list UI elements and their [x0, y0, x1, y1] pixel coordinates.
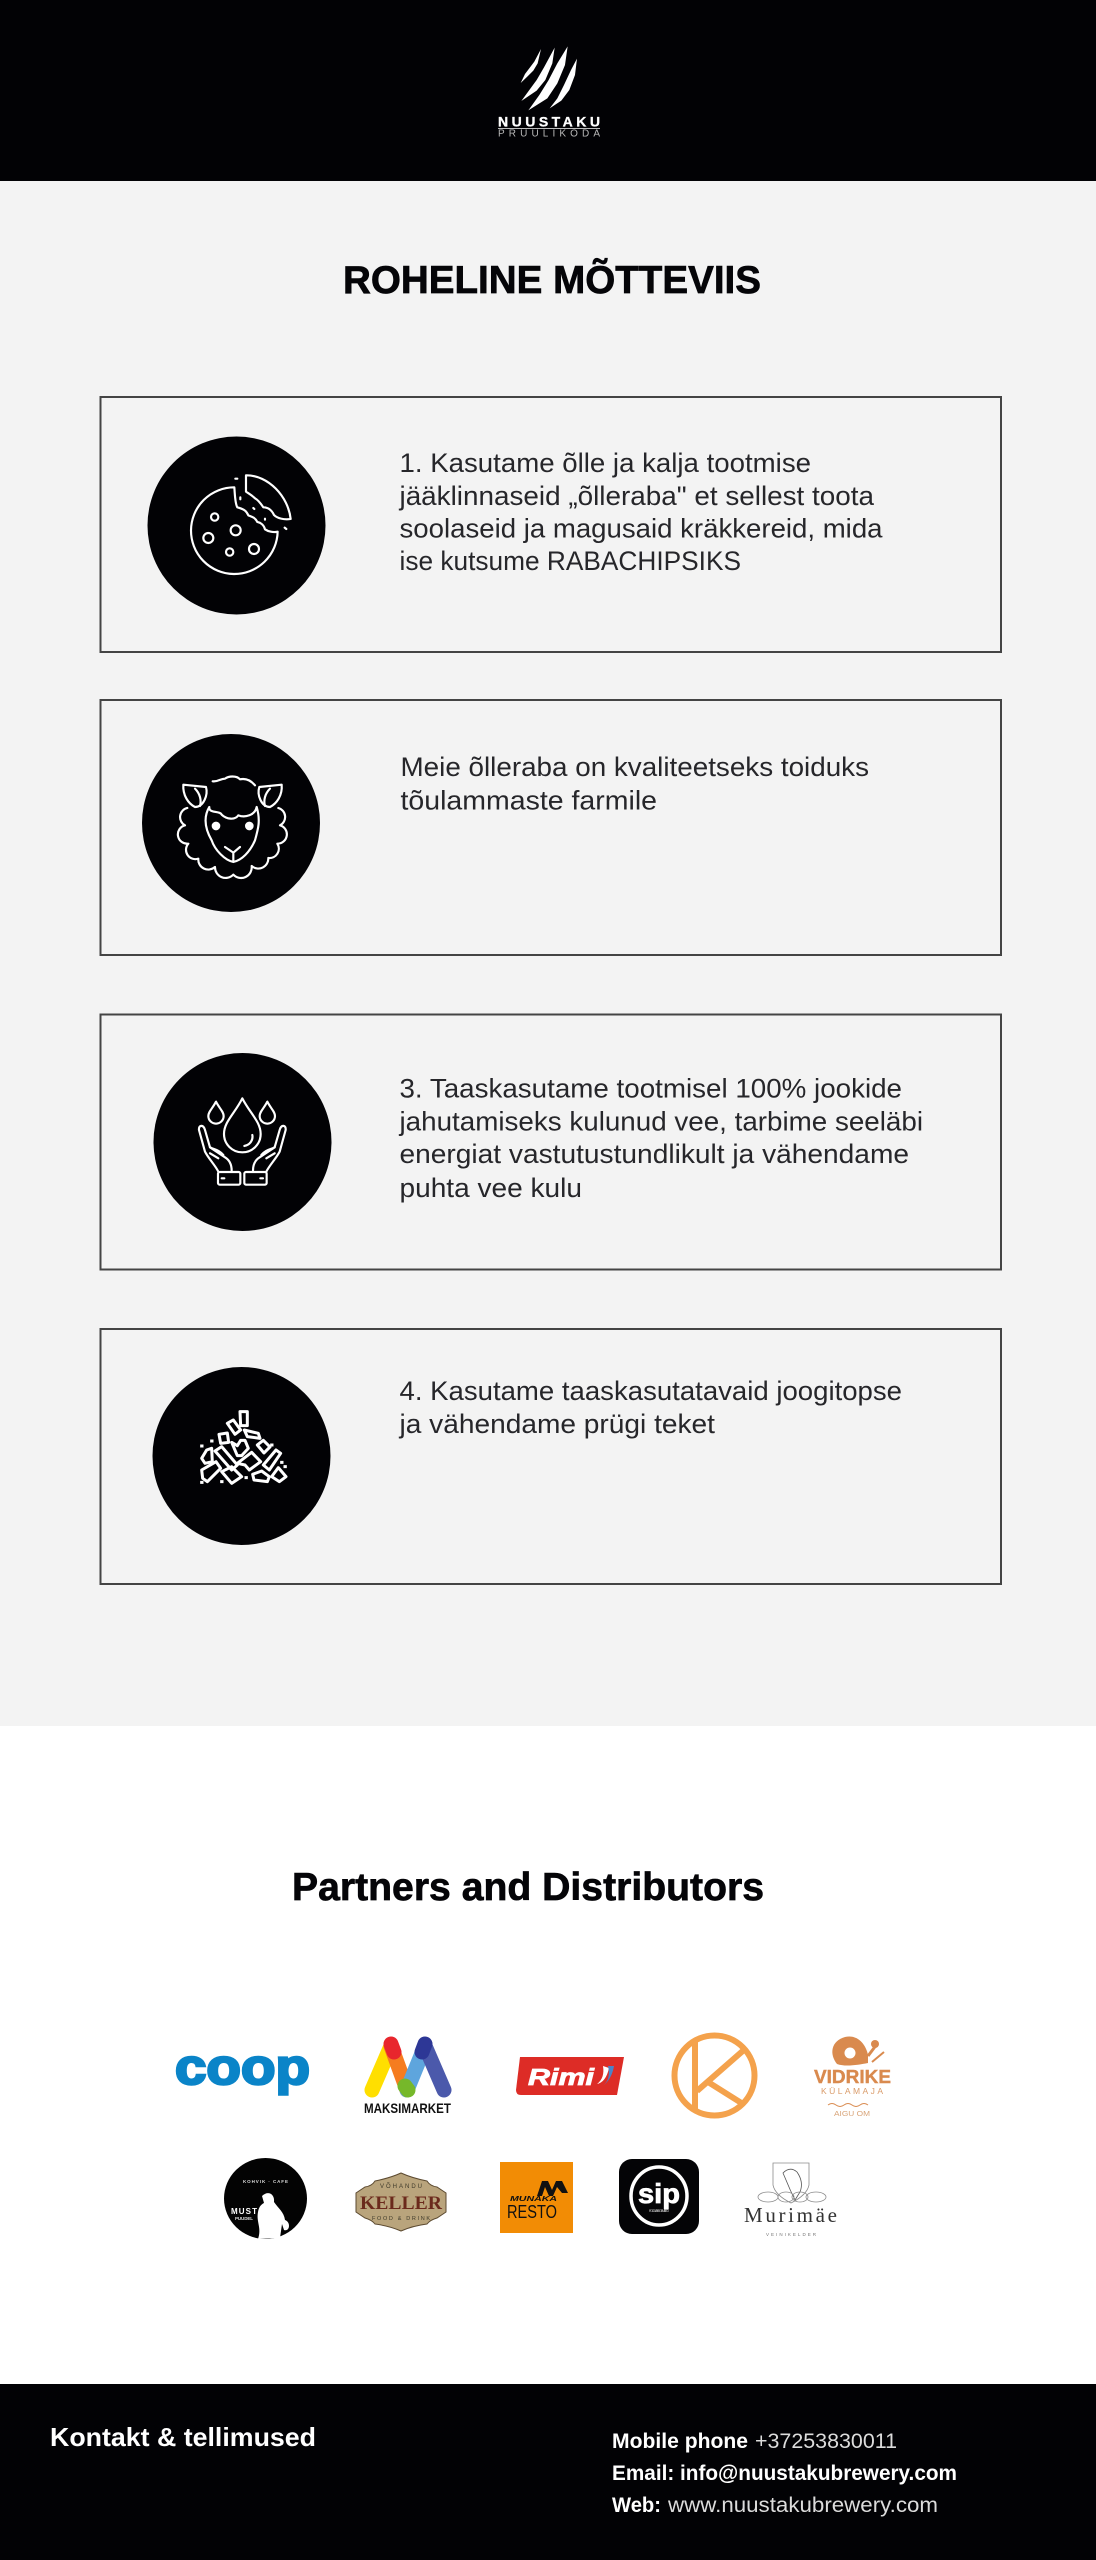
logo: Rimi: Rimi	[528, 2064, 595, 2090]
logo: Sip: FOOD · JA TEGEMISED	[649, 2209, 669, 2213]
logo: Murimäe	[744, 2163, 837, 2237]
logo: Keller	[356, 2173, 446, 2231]
card 3 text: 3. Taaskasutame tootmisel 100% jookide	[400, 1074, 902, 1104]
logo: Vidrike Külamaja	[814, 2036, 891, 2118]
card 3 text: energiat vastutustundlikult ja vähendame	[400, 1139, 909, 1169]
logo: Coop: coop	[175, 2039, 310, 2095]
panel: footer	[0, 2384, 1096, 2560]
contact: phone: Mobile phone	[612, 2429, 748, 2453]
logo: Must Puudel: KOHVIK · CAFE	[243, 2179, 288, 2184]
logo: Sip: sip	[638, 2178, 680, 2209]
card 1 text: 1. Kasutame õlle ja kalja tootmise	[400, 448, 811, 478]
card 4 text: 4. Kasutame taaskasutatavaid joogitopse	[400, 1376, 902, 1406]
card 1 text: jääklinnaseid „õlleraba" et sellest toota	[398, 481, 874, 511]
heading: Roheline mõtteviis: ROHELINE MÕTTEVIIS	[343, 258, 761, 302]
logo: Keller: KELLER	[360, 2193, 442, 2214]
card 3 text: puhta vee kulu	[400, 1173, 582, 1203]
logo: Munaka Resto: MUNAKA	[510, 2194, 557, 2203]
icon: bitten cookie	[148, 436, 326, 614]
logo: Munaka Resto	[500, 2162, 573, 2233]
card 1 text: soolaseid ja magusaid kräkkereid, mida	[400, 514, 883, 544]
panel: card 3	[100, 1014, 1001, 1270]
icon: sheep head	[142, 734, 320, 912]
logo: Must Puudel	[224, 2158, 307, 2239]
card 3 text	[398, 1074, 923, 1203]
heading: Partners and Distributors: Partners and Distributors	[292, 1866, 764, 1909]
logo: Rimi	[516, 2057, 624, 2095]
logo: Vidrike Külamaja: KÜLAMAJA	[821, 2086, 883, 2096]
card 2 text	[400, 752, 869, 816]
panel: grey content section	[0, 181, 1096, 1726]
contact: phone: +37253830011	[755, 2429, 897, 2453]
footer heading: Kontakt & tellimused	[50, 2422, 316, 2452]
icon: pile of litter	[152, 1367, 330, 1545]
logo: Vidrike Külamaja: VIDRIKE	[814, 2067, 891, 2087]
logo: Must Puudel: MUST	[231, 2207, 257, 2216]
logo wordmark: NUUSTAKU	[498, 114, 600, 130]
logo: Maksimarket: MAKSIMARKET	[364, 2100, 451, 2116]
contact: email: Email: info@nuustakubrewery.com	[612, 2461, 957, 2485]
logo: Murimäe: Murimäe	[744, 2203, 837, 2227]
card 1 text	[398, 448, 883, 576]
panel: card 2	[100, 700, 1001, 955]
icon: claw marks logo	[521, 46, 577, 110]
contact: web: www.nuustakubrewery.com	[667, 2493, 938, 2517]
logo: Maksimarket	[364, 2044, 451, 2116]
logo: K in circle	[674, 2036, 754, 2116]
logo: Munaka Resto: RESTO	[507, 2202, 557, 2222]
logo: Keller: VÕHANDU	[380, 2183, 422, 2190]
panel: card 1	[100, 397, 1001, 652]
logo: Sip	[619, 2159, 699, 2234]
contact: web: Web:	[612, 2493, 661, 2517]
card 3 text: jahutamiseks kulunud vee, tarbime seeläbi	[398, 1106, 923, 1136]
logo: Murimäe: VEINIKELDER	[766, 2232, 817, 2237]
card 4 text	[398, 1376, 902, 1439]
logo wordmark	[498, 114, 600, 140]
card 1 text: ise kutsume RABACHIPSIKS	[400, 546, 741, 576]
panel: header band	[0, 0, 1096, 181]
card 4 text: ja vähendame prügi teket	[398, 1409, 716, 1439]
contact: phone	[612, 2429, 897, 2453]
logo: Vidrike Külamaja: AIGU OM	[834, 2109, 870, 2118]
logo: Keller: FOOD & DRINK	[372, 2216, 430, 2222]
panel: card 4	[100, 1329, 1001, 1584]
logo wordmark: PRUULIKODA	[498, 128, 600, 140]
icon: water drops in hands	[154, 1053, 332, 1231]
logo: Must Puudel: PUUDEL	[235, 2216, 253, 2221]
card 2 text: Meie õlleraba on kvaliteetseks toiduks	[400, 752, 869, 782]
card 2 text: tõulammaste farmile	[400, 786, 657, 816]
